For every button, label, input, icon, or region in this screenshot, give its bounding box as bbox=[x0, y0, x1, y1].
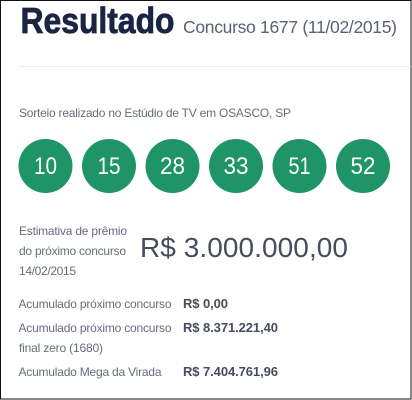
ball 33: 33 bbox=[224, 153, 248, 180]
prize estimate label bbox=[19, 224, 127, 278]
ball 33 bbox=[209, 139, 263, 193]
accumulated final zero row: R$ 8.371.221,40 bbox=[183, 320, 278, 335]
title: Resultado bbox=[20, 0, 174, 41]
accumulated Mega da Virada row: R$ 7.404.761,96 bbox=[183, 364, 278, 379]
ball 10 bbox=[18, 139, 72, 193]
accumulated Mega da Virada row: Acumulado Mega da Virada bbox=[18, 365, 162, 379]
prize estimate label: Estimativa de prêmio bbox=[19, 224, 127, 238]
prize estimate label: do próximo concurso bbox=[19, 244, 126, 258]
ball 51: 51 bbox=[288, 153, 310, 180]
subtitle: contest number and date: Concurso 1677 (11/02/2015) bbox=[183, 17, 397, 37]
ball 51 bbox=[272, 139, 326, 193]
draw location text: Sorteio realizado no Estúdio de TV em OSASCO, SP bbox=[19, 106, 291, 120]
ball 52: 52 bbox=[350, 153, 376, 180]
ball 15: 15 bbox=[98, 153, 120, 180]
prize estimate label: 14/02/2015 bbox=[19, 264, 76, 278]
drawn numbers bbox=[18, 139, 390, 193]
ball 28 bbox=[146, 139, 200, 193]
ball 28: 28 bbox=[160, 153, 185, 180]
accumulated next contest row bbox=[18, 296, 228, 311]
accumulated next contest row: Acumulado próximo concurso bbox=[18, 297, 172, 311]
ball 10: 10 bbox=[34, 153, 57, 180]
accumulated next contest row: R$ 0,00 bbox=[183, 296, 228, 311]
prize estimate value: R$ 3.000.000,00 bbox=[140, 232, 348, 263]
accumulated final zero row: Acumulado próximo concurso bbox=[18, 321, 172, 335]
ball 52 bbox=[336, 139, 390, 193]
accumulated Mega da Virada row bbox=[18, 364, 278, 379]
ball 15 bbox=[82, 139, 136, 193]
accumulated final zero row: final zero (1680) bbox=[19, 341, 103, 355]
accumulated final zero row bbox=[18, 320, 278, 355]
